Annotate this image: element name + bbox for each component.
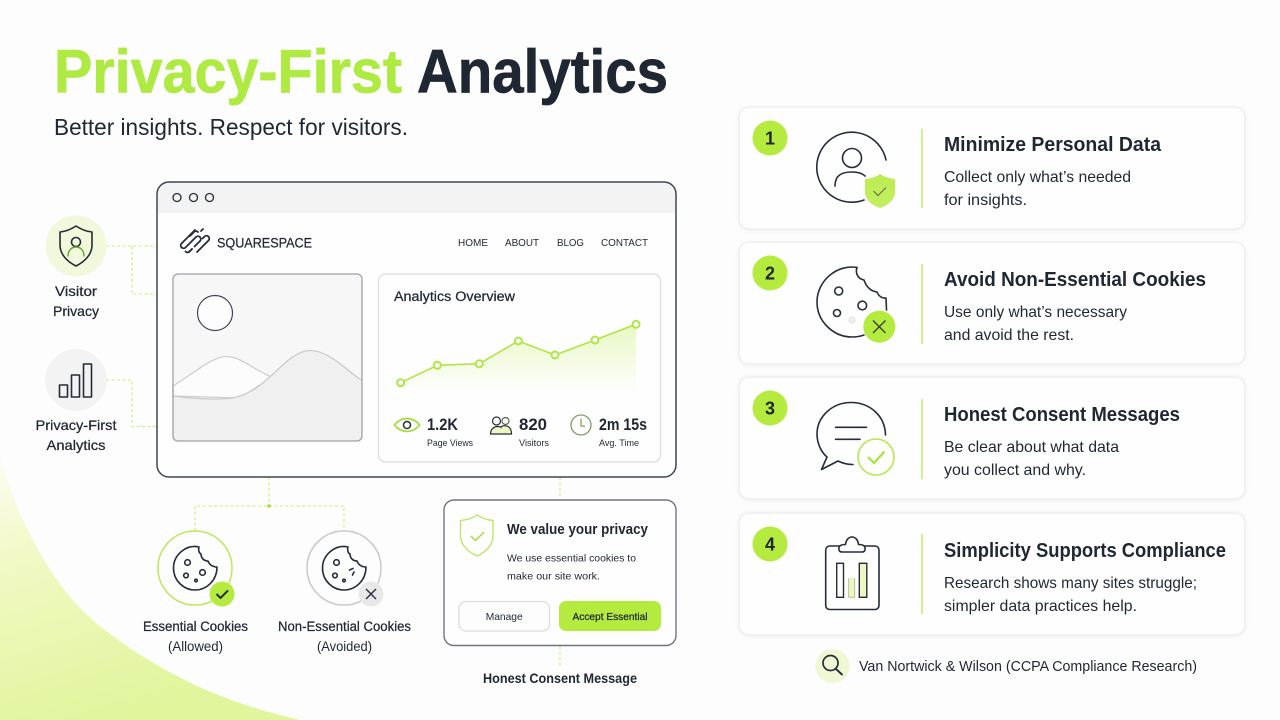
non-essential cookies: Non-Essential Cookies	[278, 619, 411, 634]
number badge 4	[752, 526, 788, 562]
card text: and avoid the rest.	[944, 327, 1074, 344]
number badge 2: 2	[765, 264, 775, 284]
essential cookies: (Allowed)	[168, 639, 223, 654]
panel: consent dialog: We value your privacy	[507, 522, 648, 538]
navigation: BLOG	[557, 237, 584, 249]
source citation	[816, 649, 1197, 683]
card text: Use only what’s necessary	[944, 304, 1127, 321]
card text	[944, 540, 1226, 615]
number badge 4: 4	[765, 534, 775, 554]
card 3: honest consent messages	[739, 377, 1245, 499]
icon: person with shield	[817, 132, 895, 208]
card 1: minimize personal data	[739, 107, 1245, 229]
non-essential cookies: (Avoided)	[317, 639, 372, 654]
button: accept essential: Accept Essential	[572, 611, 648, 623]
icon: bar chart	[45, 349, 107, 411]
icon: squarespace logo	[181, 229, 209, 252]
number badge 3	[752, 390, 788, 426]
navigation: CONTACT	[601, 237, 649, 249]
card text: simpler data practices help.	[944, 598, 1137, 615]
title: Analytics	[417, 38, 668, 106]
stat: page views	[394, 416, 473, 449]
title	[54, 38, 668, 106]
card 4: simplicity supports compliance	[739, 513, 1245, 635]
navigation: HOME	[458, 237, 488, 249]
image placeholder	[173, 274, 362, 441]
left label: visitor privacy: Privacy	[53, 303, 99, 319]
card text: Research shows many sites struggle;	[944, 575, 1197, 592]
left label: visitor privacy: Visitor	[55, 283, 97, 299]
panel: consent dialog	[444, 500, 676, 646]
stat: average time: 2m 15s	[599, 416, 647, 434]
card text: Be clear about what data	[944, 439, 1119, 456]
brand name: SQUARESPACE	[217, 236, 312, 250]
card text	[944, 134, 1162, 209]
connector lines	[106, 246, 560, 665]
stat: average time	[571, 415, 647, 449]
title: Privacy-First	[54, 38, 402, 106]
button: accept essential	[559, 601, 661, 631]
card text: Minimize Personal Data	[944, 134, 1162, 156]
number badge 1: 1	[765, 128, 775, 148]
card text: Simplicity Supports Compliance	[944, 540, 1226, 562]
left label: privacy-first analytics: Privacy-First	[36, 417, 117, 433]
icon: avoided cookie	[307, 531, 384, 606]
panel: analytics overview: Analytics Overview	[394, 289, 515, 304]
divider	[921, 264, 923, 344]
source citation: Van Nortwick & Wilson (CCPA Compliance Research)	[859, 659, 1197, 675]
number badge 3: 3	[765, 398, 775, 418]
panel: consent dialog: We use essential cookies to	[507, 552, 636, 564]
left label: privacy-first analytics	[36, 349, 117, 453]
button: manage	[459, 602, 550, 631]
line chart	[397, 321, 640, 392]
icon: allowed cookie	[158, 531, 234, 606]
number badge 1	[752, 120, 788, 156]
navigation	[458, 237, 649, 249]
left label: privacy-first analytics: Analytics	[46, 437, 106, 453]
number badge 2	[752, 256, 788, 290]
panel: analytics overview	[378, 274, 660, 462]
browser window	[157, 182, 676, 477]
divider	[921, 399, 923, 479]
subtitle: Better insights. Respect for visitors.	[54, 114, 408, 140]
icon: visitor privacy shield	[46, 216, 106, 276]
left label: visitor privacy	[46, 216, 106, 319]
card text	[944, 269, 1206, 344]
divider	[921, 129, 923, 208]
stat: page views: Page Views	[427, 438, 473, 449]
card text: Avoid Non-Essential Cookies	[944, 269, 1206, 291]
stat: visitors: Visitors	[519, 438, 549, 449]
button: manage: Manage	[486, 611, 523, 623]
card text: Collect only what’s needed	[944, 169, 1131, 186]
panel: consent dialog: make our site work.	[507, 570, 600, 582]
stat: visitors: 820	[519, 416, 547, 434]
icon: magnifier	[816, 649, 850, 683]
icon: consent shield	[460, 515, 493, 556]
icon: speech bubble with check	[817, 402, 894, 475]
card text: Honest Consent Messages	[944, 404, 1180, 426]
icon: clipboard with bars	[826, 537, 879, 610]
card text	[944, 404, 1180, 479]
stat: page views: 1.2K	[427, 416, 458, 434]
label: honest consent message: Honest Consent Message	[483, 671, 637, 686]
card text: for insights.	[944, 192, 1027, 209]
non-essential cookies	[278, 531, 411, 654]
essential cookies: Essential Cookies	[143, 619, 248, 634]
card 2: avoid non-essential cookies	[739, 242, 1245, 364]
icon: cookie with cross	[817, 267, 895, 343]
window dots	[173, 194, 214, 202]
card text: you collect and why.	[944, 462, 1086, 479]
essential cookies	[143, 531, 248, 654]
stat: average time: Avg. Time	[599, 438, 639, 449]
stat: visitors	[490, 416, 549, 449]
divider	[921, 534, 923, 614]
navigation: ABOUT	[505, 237, 540, 249]
background green corner curve	[0, 455, 300, 720]
